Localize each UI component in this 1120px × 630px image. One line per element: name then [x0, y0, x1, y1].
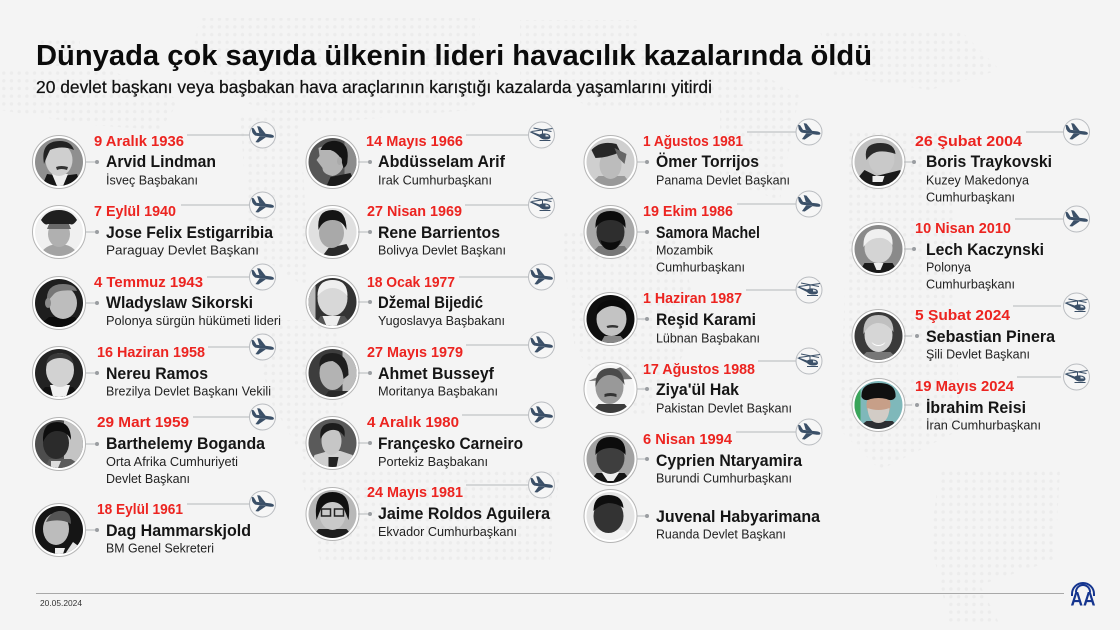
role: Paraguay Devlet Başkanı	[106, 244, 259, 258]
name: Jaime Roldos Aguilera	[378, 505, 551, 523]
portrait	[584, 490, 637, 542]
role: Cumhurbaşkanı	[926, 278, 1015, 292]
role: Cumhurbaşkanı	[926, 190, 1015, 204]
portrait	[306, 206, 359, 258]
name: Arvid Lindman	[106, 153, 216, 171]
date: 1 Ağustos 1981	[643, 133, 743, 150]
date: 19 Mayıs 2024	[915, 378, 1015, 395]
date: 1 Haziran 1987	[643, 290, 742, 307]
date: 19 Ekim 1986	[643, 203, 733, 220]
date: 26 Şubat 2004	[915, 133, 1023, 150]
role: Mozambik	[656, 244, 714, 258]
date: 17 Ağustos 1988	[643, 361, 755, 378]
title: Dünyada çok sayıda ülkenin lideri havacılık kazalarında öldü	[36, 40, 872, 72]
portrait	[32, 346, 86, 400]
date: 24 Mayıs 1981	[367, 484, 463, 501]
role: Ruanda Devlet Başkanı	[656, 528, 786, 542]
date: 4 Aralık 1980	[367, 414, 459, 431]
role: İsveç Başbakanı	[106, 174, 198, 188]
name: Boris Traykovski	[926, 153, 1052, 171]
name: Françesko Carneiro	[378, 435, 523, 453]
entry: Nereu Ramos	[32, 334, 276, 400]
entry: Cyprien Ntaryamira	[584, 419, 822, 486]
name: Abdüsselam Arif	[378, 153, 505, 171]
icon: plane	[528, 264, 554, 290]
date: 6 Nisan 1994	[643, 431, 733, 448]
entry: Ahmet Busseyf	[306, 332, 554, 400]
entry: Lech Kaczynski	[852, 206, 1090, 292]
name: Juvenal Habyarimana	[656, 508, 821, 526]
icon: helicopter	[528, 192, 554, 218]
entry: Barthelemy Boganda	[32, 404, 276, 486]
date: 10 Nisan 2010	[915, 220, 1011, 237]
name: İbrahim Reisi	[926, 399, 1026, 417]
role: Orta Afrika Cumhuriyeti	[106, 455, 238, 469]
name: Wladyslaw Sikorski	[106, 294, 253, 312]
portrait	[32, 136, 86, 188]
portrait	[306, 136, 359, 188]
entry: Rene Barrientos	[306, 192, 554, 258]
entry: Omer Torrijos	[584, 119, 822, 188]
date: 14 Mayıs 1966	[366, 133, 463, 150]
icon: plane	[250, 404, 276, 430]
entry: Dzemal Bijedic	[306, 264, 554, 328]
icon: helicopter	[796, 348, 822, 374]
date: 18 Eylül 1961	[97, 501, 183, 518]
icon: plane	[796, 191, 822, 217]
name: Jose Felix Estigarribia	[106, 224, 274, 242]
role: Polonya sürgün hükümeti lideri	[106, 314, 281, 328]
date: 27 Mayıs 1979	[367, 344, 463, 361]
date: 18 Ocak 1977	[367, 274, 455, 291]
name: Barthelemy Boganda	[106, 435, 266, 453]
portrait	[306, 346, 359, 400]
portrait	[852, 310, 905, 362]
name: Ziya'ül Hak	[656, 381, 740, 399]
name: Sebastian Pinera	[926, 328, 1056, 346]
name: Nereu Ramos	[106, 365, 208, 383]
portrait	[852, 222, 905, 276]
role	[106, 455, 238, 486]
entry: Resid Karami	[584, 277, 822, 346]
portrait	[32, 504, 86, 556]
icon: helicopter	[1064, 293, 1090, 319]
role: Ekvador Cumhurbaşkanı	[378, 525, 517, 539]
role: Moritanya Başbakanı	[378, 384, 498, 398]
name: Ömer Torrijos	[656, 152, 759, 171]
portrait	[584, 136, 637, 188]
icon: plane	[250, 264, 276, 290]
role: Pakistan Devlet Başkanı	[656, 402, 792, 416]
role: Cumhurbaşkanı	[656, 260, 745, 274]
entry: Boris Traykovski	[852, 119, 1090, 204]
entry: Ziyaul Hak	[584, 348, 822, 416]
name: Reşid Karami	[656, 311, 756, 329]
name: Lech Kaczynski	[926, 241, 1044, 259]
icon: plane	[250, 192, 276, 218]
portrait	[306, 276, 359, 328]
icon: helicopter	[1064, 364, 1090, 390]
portrait	[852, 136, 905, 188]
icon: plane	[250, 334, 276, 360]
icon: plane	[528, 332, 554, 358]
portrait	[306, 416, 359, 470]
date: 29 Mart 1959	[97, 414, 189, 431]
icon: plane	[528, 402, 554, 428]
icon: plane	[1064, 119, 1090, 145]
role: İran Cumhurbaşkanı	[926, 418, 1041, 432]
icon: plane	[250, 122, 276, 148]
entry: Juvenal Habyarimana	[584, 490, 821, 542]
role: Yugoslavya Başbakanı	[378, 314, 505, 328]
date: 16 Haziran 1958	[97, 344, 205, 361]
role: Bolivya Devlet Başkanı	[378, 244, 506, 258]
publication date: 20.05.2024	[40, 598, 82, 608]
role: Portekiz Başbakanı	[378, 455, 488, 469]
role: Şili Devlet Başkanı	[926, 348, 1030, 362]
entry: Dag Hammarskjold	[32, 491, 276, 556]
icon: helicopter	[796, 277, 822, 303]
role	[926, 260, 1015, 292]
role: Irak Cumhurbaşkanı	[378, 174, 492, 188]
entry: Abdüsselam Arif	[306, 122, 554, 188]
role: Burundi Cumhurbaşkanı	[656, 472, 792, 486]
portrait	[32, 276, 86, 330]
name: Džemal Bijedić	[378, 294, 483, 312]
role	[926, 174, 1029, 204]
date: 7 Eylül 1940	[94, 203, 176, 220]
date: 27 Nisan 1969	[367, 203, 462, 220]
name: Dag Hammarskjold	[106, 522, 251, 540]
role: Brezilya Devlet Başkanı Vekili	[106, 384, 271, 398]
name: Ahmet Busseyf	[378, 365, 494, 383]
portrait	[584, 292, 637, 346]
subtitle: 20 devlet başkanı veya başbakan hava araçlarının karıştığı kazalarda yaşamlarını yitirdi	[36, 77, 712, 97]
role: Kuzey Makedonya	[926, 174, 1029, 188]
entry: Sebastian Pinera	[852, 293, 1090, 362]
role	[656, 244, 745, 274]
icon: helicopter	[528, 122, 554, 148]
date: 9 Aralık 1936	[94, 133, 184, 150]
icon: plane	[250, 491, 276, 517]
icon: plane	[796, 119, 822, 145]
portrait	[584, 432, 637, 486]
portrait	[584, 206, 637, 258]
entry: Jaime Roldos Aguilera	[306, 472, 554, 540]
logo: AA: AA	[1070, 590, 1096, 610]
entry: Jose Felix Estigarribia	[32, 192, 276, 258]
portrait	[584, 362, 637, 416]
icon: plane	[796, 419, 822, 445]
entry: Samora Machel	[584, 191, 822, 274]
portrait	[852, 378, 905, 432]
role: Devlet Başkanı	[106, 472, 190, 486]
name: Cyprien Ntaryamira	[656, 452, 803, 470]
role: Panama Devlet Başkanı	[656, 174, 790, 188]
portrait	[306, 488, 359, 540]
portrait	[32, 206, 86, 258]
role: Polonya	[926, 260, 971, 274]
entry: Arvid Lindman	[32, 122, 276, 188]
name: Samora Machel	[656, 224, 760, 242]
entry: Wladyslaw Sikorski	[32, 264, 281, 330]
entry: Francesko Carneiro	[306, 402, 554, 470]
date: 5 Şubat 2024	[915, 307, 1011, 324]
portrait	[32, 418, 86, 470]
icon: plane	[528, 472, 554, 498]
icon: plane	[1064, 206, 1090, 232]
date: 4 Temmuz 1943	[94, 274, 203, 291]
entry: Ibrahim Reisi	[852, 364, 1090, 432]
role: BM Genel Sekreteri	[106, 542, 214, 556]
name: Rene Barrientos	[378, 224, 500, 242]
role: Lübnan Başbakanı	[656, 332, 760, 346]
